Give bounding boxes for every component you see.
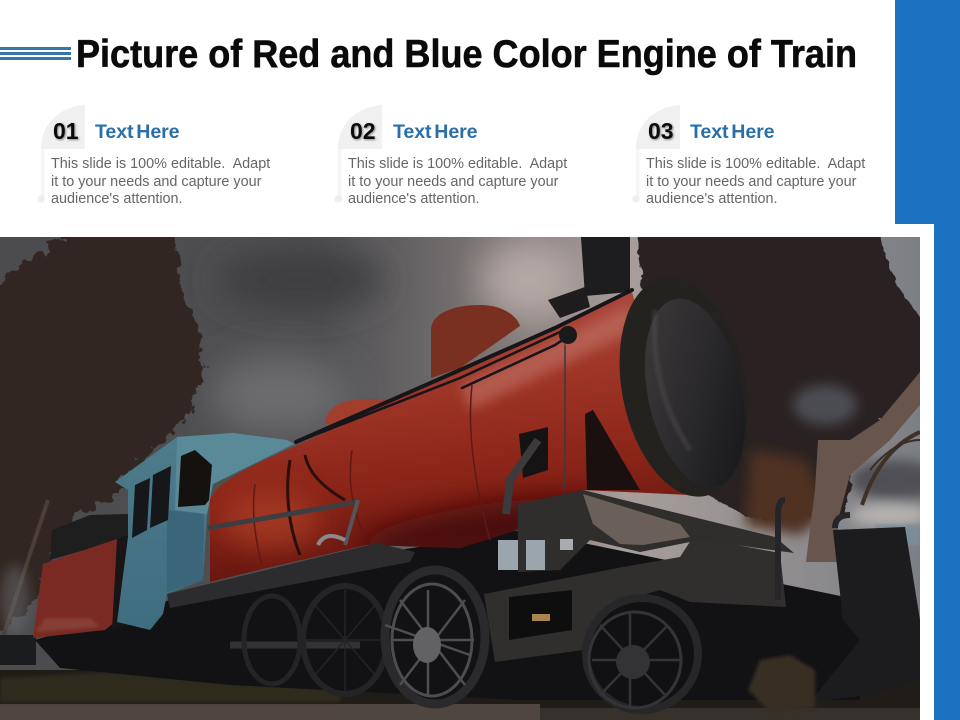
body text 03 — [646, 156, 866, 207]
item 03 — [632, 105, 866, 207]
sand dome — [431, 305, 520, 378]
stack platform — [548, 287, 590, 318]
front pilot wheel — [586, 598, 698, 710]
decorative title lines — [0, 47, 71, 60]
cowcatcher — [778, 500, 920, 702]
small steam dome — [325, 399, 388, 430]
smokebox door — [602, 266, 766, 508]
number 01: 01 — [53, 118, 79, 144]
body text 01 — [51, 156, 270, 207]
undercarriage shadow — [35, 530, 860, 700]
item 02 — [334, 105, 568, 207]
heading 01: Text Here — [95, 121, 179, 143]
quarter badge 01 — [38, 105, 85, 202]
heading 03: Text Here — [690, 121, 774, 143]
ground and grass — [0, 668, 920, 720]
quarter badge 03 — [632, 105, 680, 203]
rear driving wheels — [244, 586, 387, 694]
tender coal bunker — [50, 514, 130, 560]
heading 02: Text Here — [393, 121, 477, 143]
blue cab — [115, 433, 295, 630]
saddle and upper frame — [518, 490, 794, 572]
number 03: 03 — [648, 118, 674, 144]
sky gaps under boiler — [498, 539, 573, 570]
body text 01: it to your needs and capture your — [51, 174, 261, 190]
boiler seams — [254, 385, 490, 565]
cab door opening — [178, 450, 212, 507]
right tree — [634, 214, 936, 562]
cab windows — [132, 466, 171, 538]
tender red body — [33, 539, 117, 638]
body text 03: it to your needs and capture your — [646, 174, 856, 190]
smoke stack — [581, 237, 630, 296]
left tree — [0, 219, 202, 644]
sky — [0, 237, 940, 720]
body text 02: it to your needs and capture your — [348, 174, 558, 190]
body text 01: audience's attention. — [51, 191, 183, 207]
distant rail car at far left — [0, 635, 36, 665]
frame rear section — [484, 537, 786, 662]
photo: red and blue steam locomotive — [0, 237, 920, 720]
body text 02 — [348, 156, 568, 207]
body text 03: audience's attention. — [646, 191, 778, 207]
body text 03: This slide is 100% editable. Adapt — [646, 156, 865, 172]
body text 02: This slide is 100% editable. Adapt — [348, 156, 567, 172]
quarter badge 02 — [334, 105, 382, 202]
cross head and rods — [208, 500, 360, 645]
number 02: 02 — [350, 118, 376, 144]
white photo frame — [0, 224, 934, 720]
body text 02: audience's attention. — [348, 191, 480, 207]
main driving wheel — [385, 570, 485, 704]
blue side panel — [895, 0, 960, 720]
body text 01: This slide is 100% editable. Adapt — [51, 156, 270, 172]
running board — [167, 543, 415, 608]
top pipes — [296, 290, 632, 490]
front grass — [748, 655, 815, 712]
boiler — [210, 292, 690, 582]
tender — [33, 514, 130, 638]
steam pipe and cover — [506, 410, 640, 514]
frame access panel — [509, 590, 572, 640]
item 01 — [38, 105, 270, 207]
